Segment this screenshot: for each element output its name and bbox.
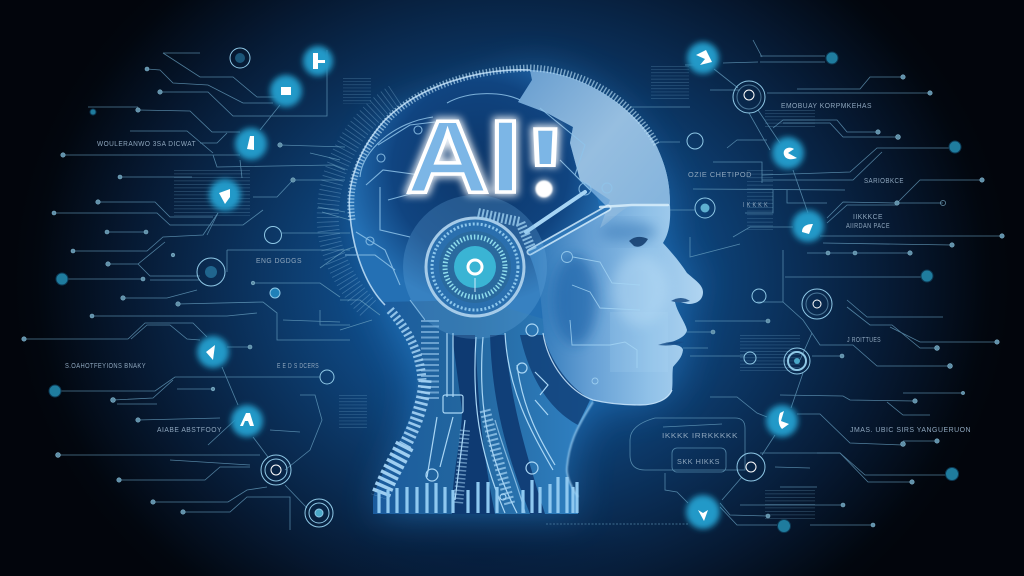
teal node: right 2 — [772, 137, 804, 169]
label texts: I K K K K — [743, 202, 768, 209]
teal node: left 5 — [197, 336, 229, 368]
AI! headline: ! — [523, 108, 568, 216]
head glow — [350, 70, 703, 514]
small teal dots — [49, 52, 961, 532]
AI! headline: A — [406, 100, 489, 215]
head: jaw highlight — [543, 333, 672, 405]
AI! exclamation bar base — [535, 164, 553, 167]
head: lower shade — [280, 515, 680, 576]
head: face shading — [553, 222, 668, 372]
label texts: IKKKK IRRKKKKK — [662, 433, 738, 440]
head: skull back spikes — [328, 95, 395, 310]
head: skull interior — [349, 70, 600, 340]
AI! headline: ! — [523, 108, 568, 216]
AI! headline: I — [489, 99, 522, 214]
head: skull rim ticks — [351, 68, 657, 220]
teal node: left 6 — [231, 405, 263, 437]
label texts: S.OAHOTFEYIONS BNAKY — [65, 363, 146, 370]
label texts: OZIE CHETIPOD — [688, 172, 752, 179]
teal node: left 3 — [235, 128, 267, 160]
circuit: data stripe blocks — [212, 66, 790, 520]
label texts — [65, 103, 971, 466]
label texts: EMOBUAY KORPMKEHAS — [781, 103, 872, 110]
AI! headline: I — [489, 99, 522, 214]
label texts: JMAS. UBIC SIRS YANGUERUON — [850, 427, 971, 434]
label texts: SARIOBKCE — [864, 178, 904, 185]
AI! headline: A — [406, 100, 489, 215]
teal node: right 3 — [792, 210, 824, 242]
circuit: right side traces — [546, 40, 1002, 525]
teal node: left 4 — [209, 179, 241, 211]
ear disc — [403, 195, 547, 339]
teal node: left 1 — [303, 46, 333, 76]
teal node: right 4 — [766, 405, 798, 437]
head: bar base — [379, 477, 577, 513]
ring icons — [197, 48, 832, 527]
head: helmet tubes — [526, 192, 668, 252]
label texts: AIIRDAN PACE — [846, 223, 890, 230]
circuit: left side traces — [24, 50, 380, 530]
head: nostril and lips — [658, 298, 690, 346]
circuit: line end dots — [22, 67, 1004, 527]
teal node: left 2 — [270, 75, 302, 107]
head: eye — [629, 237, 648, 247]
label texts: ENG DGDGS — [256, 258, 302, 265]
label texts: E E D S DCERS — [277, 363, 319, 370]
head: face and cap — [518, 70, 703, 405]
head: neck dark bands — [452, 335, 590, 514]
AI! headline — [398, 111, 566, 204]
label texts: SKK HIKKS — [677, 459, 720, 466]
label texts: J ROITTUES — [847, 337, 881, 344]
label texts: AIABE ABSTFOOY — [157, 427, 222, 434]
head: brain circuits — [345, 94, 612, 320]
head: neck strands — [426, 324, 555, 513]
teal node: right 1 — [687, 42, 719, 74]
label texts: IIKKKCE — [853, 214, 883, 221]
head: neck ribs — [380, 310, 510, 505]
head: face circuits — [562, 252, 640, 384]
teal node: right 5 — [686, 495, 720, 529]
head — [280, 68, 703, 576]
label texts: WOULERANWO 3SA DICWAT — [97, 141, 196, 148]
head: neck — [373, 300, 593, 514]
head: cap panel — [518, 70, 670, 228]
AI! exclamation dot — [536, 180, 552, 198]
head: neck front highlight — [567, 402, 593, 497]
head: skull outline — [349, 70, 530, 305]
